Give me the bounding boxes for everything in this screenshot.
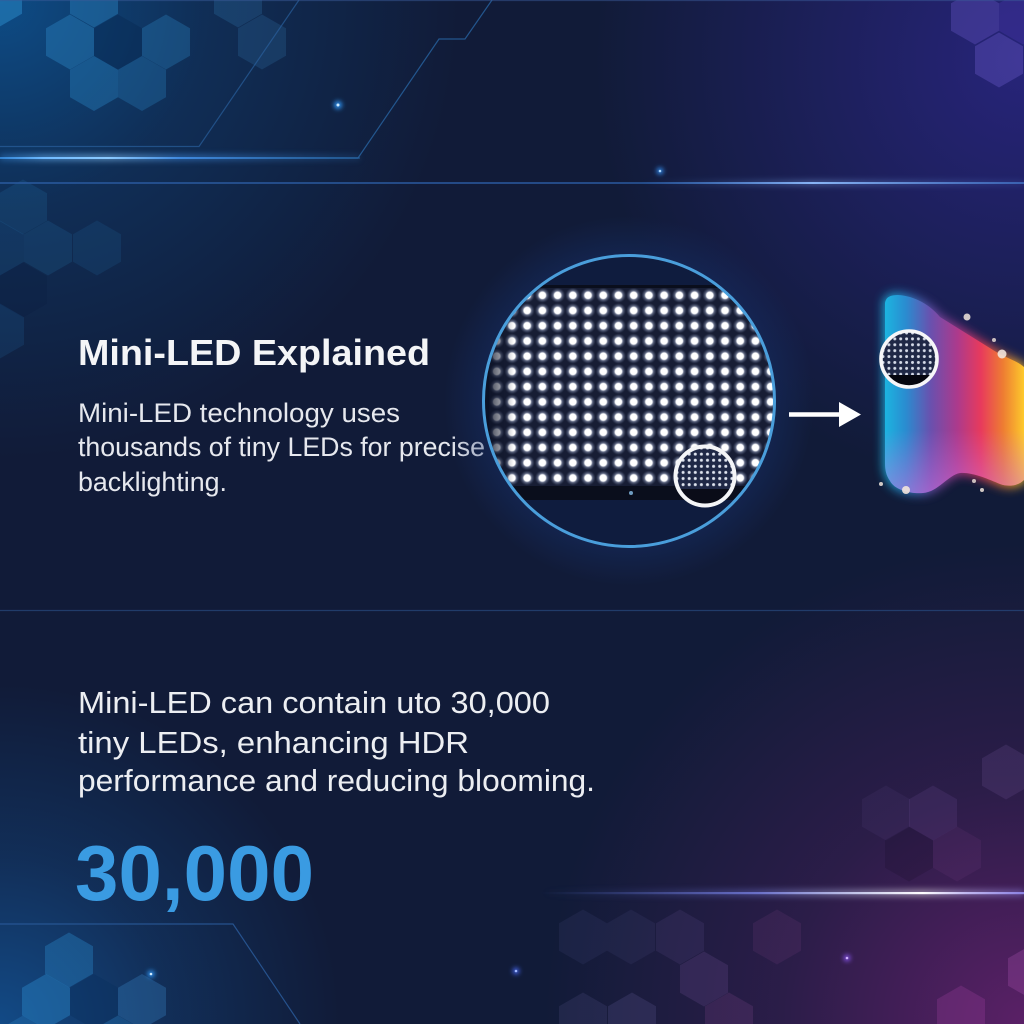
statistic description: tiny LEDs, enhancing HDR xyxy=(78,726,469,760)
big number: 30,000 xyxy=(75,829,314,917)
intro text block xyxy=(78,398,485,497)
hexagons: top left cluster xyxy=(0,0,286,111)
colorful display shape xyxy=(879,295,1024,494)
inset LED circle xyxy=(880,330,938,389)
hexagons: top right cluster xyxy=(951,0,1024,88)
hexagons: left cluster xyxy=(0,180,121,358)
sparkles around the shape xyxy=(879,314,1006,494)
glowing horizontal lines xyxy=(0,154,1024,897)
intro text block: backlighting. xyxy=(78,467,227,497)
statistic description: performance and reducing blooming. xyxy=(78,764,595,798)
hexagons: bottom left cluster xyxy=(0,932,166,1024)
intro text block: Mini-LED technology uses xyxy=(78,398,400,428)
hexagons: bottom right clusters xyxy=(559,744,1024,1024)
intro text block: thousands of tiny LEDs for precise xyxy=(78,432,485,462)
statistic description xyxy=(78,686,595,798)
heading: Mini-LED Explained xyxy=(78,332,430,373)
statistic description: Mini-LED can contain uto 30,000 xyxy=(78,686,550,720)
sparkle points xyxy=(148,101,850,978)
magnified LED panel xyxy=(453,231,798,570)
arrow xyxy=(789,402,861,427)
inset zoom circle xyxy=(672,445,738,509)
